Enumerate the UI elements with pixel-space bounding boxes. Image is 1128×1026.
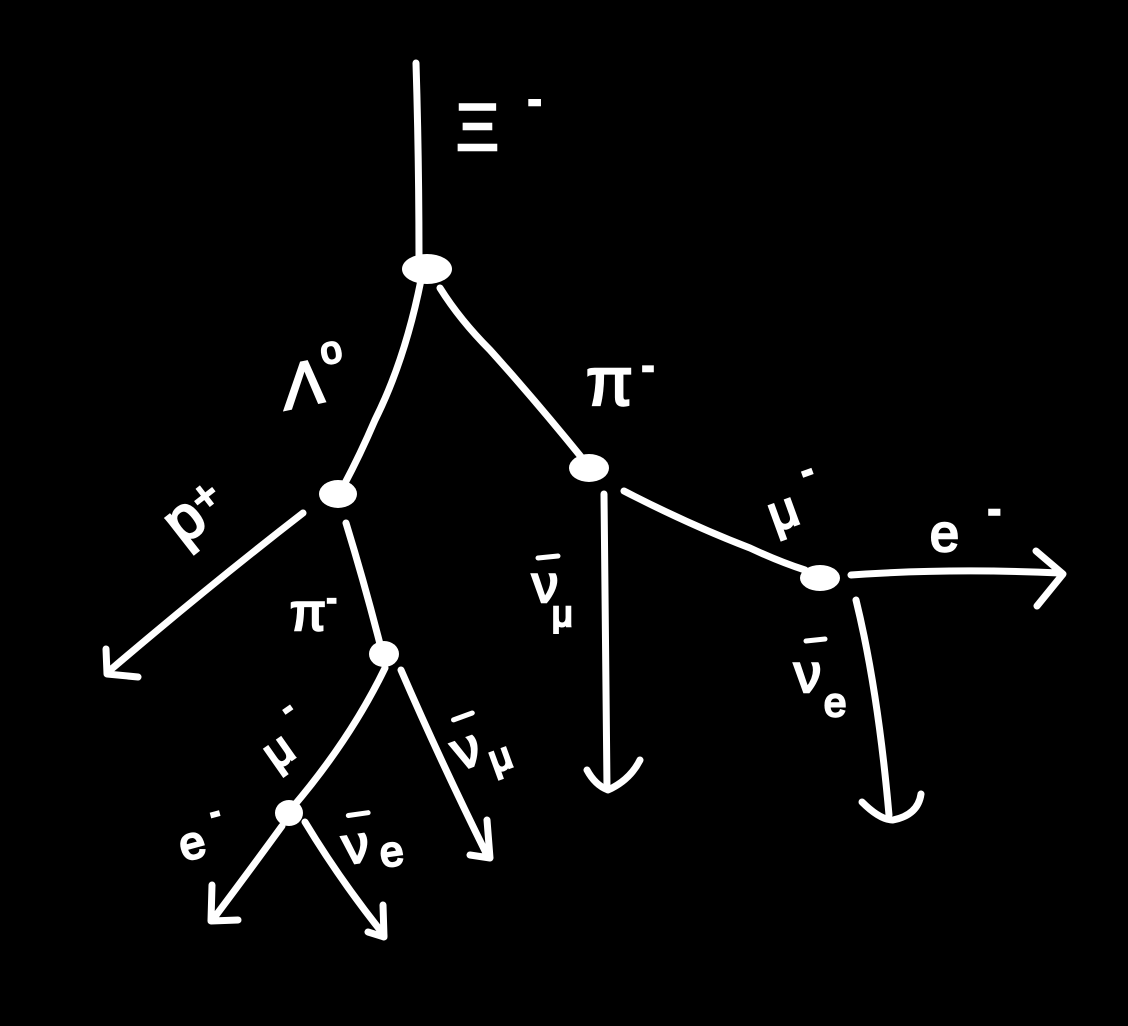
track: muon left — [292, 668, 385, 808]
label: Lambda zero: o — [316, 328, 346, 374]
track: Xi minus — [416, 63, 419, 262]
label: pi minus lower: - — [327, 583, 336, 614]
label: anti-neutrino mu lower — [442, 706, 518, 793]
label: anti-neutrino mu lower: μ — [483, 735, 518, 782]
label: electron right: - — [988, 489, 1001, 531]
label: Xi minus: Ξ — [456, 90, 499, 164]
track: Lambda zero — [344, 280, 421, 485]
label: anti-neutrino mu middle — [532, 556, 573, 634]
label: anti-neutrino e right: ν — [794, 644, 821, 704]
label: proton: p — [149, 482, 219, 557]
arrow: electron right — [851, 551, 1063, 606]
label: pi minus upper: π — [586, 344, 633, 420]
label: muon upper right: - — [795, 451, 818, 490]
track: pi minus left — [346, 523, 381, 648]
label: Xi minus: - — [528, 78, 541, 122]
label: muon upper right — [752, 451, 832, 543]
arrow: anti-neutrino mu middle — [587, 494, 640, 790]
arrow: proton — [106, 513, 303, 677]
label: electron lower — [169, 796, 232, 871]
label: Xi minus — [456, 78, 541, 164]
label: anti-neutrino e lower: e — [377, 826, 406, 876]
vertex: pi decay left — [369, 641, 399, 667]
label: electron lower: e — [173, 814, 211, 871]
vertex: Xi decay — [402, 254, 452, 284]
label: Lambda zero: Λ — [273, 347, 331, 424]
arrow: anti-neutrino e left — [305, 822, 384, 937]
label: muon upper right: μ — [760, 480, 806, 543]
label: pi minus upper — [586, 344, 654, 420]
vertex: Lambda decay — [319, 480, 357, 508]
label: proton: + — [180, 470, 229, 522]
arrow: anti-neutrino mu left — [401, 670, 490, 858]
label: anti-neutrino mu lower: ν — [443, 717, 489, 782]
track: pi minus right — [440, 288, 582, 458]
label: electron lower: - — [206, 796, 223, 828]
label: muon lower: μ — [252, 721, 303, 779]
label: electron right — [930, 489, 1001, 563]
label: proton — [149, 466, 239, 557]
label: anti-neutrino e right — [794, 639, 846, 725]
label: anti-neutrino mu middle: ν — [532, 556, 558, 614]
label: Lambda zero — [270, 328, 354, 424]
label: electron right: e — [930, 505, 959, 563]
arrow: electron left — [211, 826, 282, 921]
track: muon right — [624, 491, 805, 570]
label: pi minus lower: π — [290, 584, 326, 642]
vertex: muon decay right — [800, 565, 840, 591]
label: muon lower: - — [274, 692, 299, 723]
label: muon lower — [241, 692, 322, 779]
label: anti-neutrino mu middle: μ — [552, 593, 573, 634]
vertex: pi decay right — [569, 454, 609, 482]
label: pi minus upper: - — [642, 345, 654, 386]
arrow: anti-neutrino e right — [856, 600, 921, 820]
label: anti-neutrino e lower: ν — [339, 815, 373, 876]
label: anti-neutrino e right: e — [824, 681, 846, 725]
vertex: muon decay left — [275, 800, 303, 826]
label: anti-neutrino e lower — [338, 809, 406, 881]
